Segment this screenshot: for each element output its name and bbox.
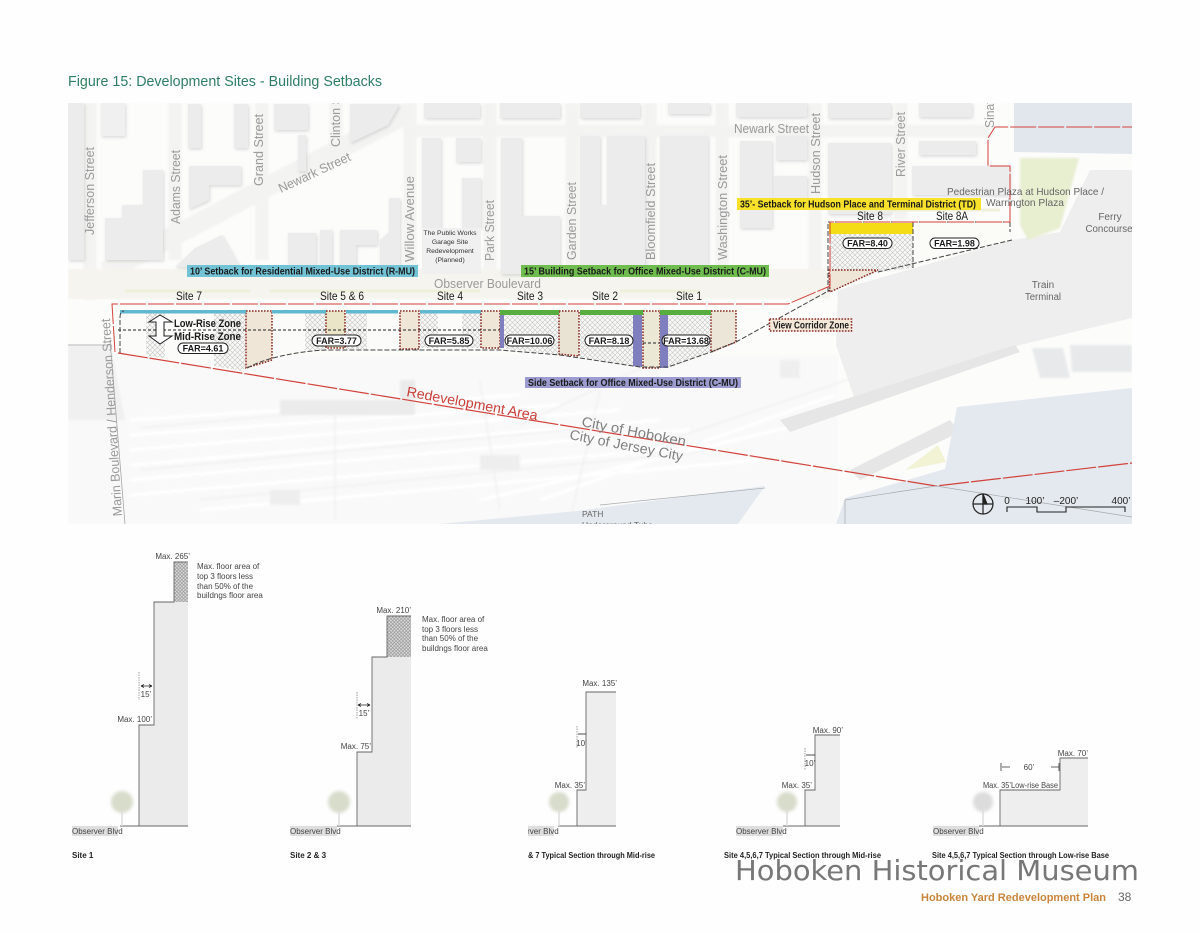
site 8 hatch	[828, 234, 913, 292]
far 4.61: FAR=4.61	[183, 344, 223, 354]
setback dimension	[139, 672, 152, 700]
rail yard	[334, 427, 592, 489]
tree	[549, 792, 569, 826]
site 4 hatch	[420, 313, 481, 348]
train terminal: Train	[1032, 280, 1054, 291]
far 1.98: FAR=1.98	[934, 238, 975, 248]
outline	[337, 616, 411, 826]
height label 210: Max. 210’	[376, 606, 411, 615]
place labels: Underground Tube	[582, 520, 653, 530]
view corridors	[246, 311, 736, 368]
place labels: Concourse	[1086, 224, 1133, 235]
river street: River Street	[893, 112, 908, 177]
observer boulevard: Observer Boulevard	[434, 276, 541, 291]
floor area note: buildngs floor area	[422, 644, 488, 653]
section: mid-rise 90	[724, 726, 882, 860]
jefferson street: Jefferson Street	[82, 147, 97, 235]
height label 265: Max. 265’	[155, 552, 190, 561]
tag: residential setback: 10’ Setback for Residential Mixed-Use District (R-MU)	[190, 266, 415, 278]
top floors hatch	[387, 616, 411, 657]
floor area note	[197, 562, 263, 600]
top floors hatch	[174, 562, 188, 602]
site 8 corridor	[829, 270, 878, 292]
floor area note: Max. floor area of	[197, 562, 260, 571]
scale bar: 0	[1004, 496, 1010, 507]
low rise label: Low-Rise Zone	[174, 318, 241, 330]
setback dimension	[805, 748, 816, 770]
page: development sites building setbacks	[68, 75, 1136, 904]
caption: & 7 Typical Section through Mid-rise	[528, 851, 656, 860]
caption: Site 2 & 3	[290, 851, 327, 860]
setback dimension	[576, 726, 587, 748]
grand street: Grand Street	[251, 114, 266, 186]
street label: Observer Blvd	[290, 827, 341, 836]
watermark: Hoboken Historical Museum	[735, 854, 1139, 887]
site 2	[580, 310, 643, 368]
outline	[120, 562, 188, 826]
side setback strips	[500, 315, 668, 368]
path tube: PATH	[582, 509, 603, 519]
street label: Observer Blvd	[508, 827, 559, 836]
site 5 and 6 hatch	[305, 313, 367, 350]
setback dimension	[357, 692, 370, 719]
redevelopment area boundary	[112, 127, 1132, 486]
site labels: Site 3	[517, 289, 543, 303]
page number: 38	[1118, 890, 1132, 904]
tag: office setback: 15’ Building Setback for Office Mixed-Use District (C-MU)	[524, 266, 766, 278]
setback dimension: 10’	[805, 759, 816, 768]
water bottom right	[836, 388, 1132, 524]
buildings	[68, 103, 1010, 274]
street grid	[68, 103, 990, 300]
platforms	[780, 345, 1020, 432]
washington street: Washington Street	[715, 155, 730, 260]
place labels	[582, 186, 1133, 530]
section: site 2 and 3	[290, 606, 488, 860]
low and mid rise zones	[149, 315, 241, 344]
green plaza	[1020, 158, 1079, 240]
park street: Park Street	[482, 200, 497, 261]
site 8 setback	[829, 223, 913, 234]
far 5.85: FAR=5.85	[429, 336, 469, 346]
caption: Site 1	[72, 851, 94, 860]
section: site 1	[72, 552, 263, 860]
floor area note: than 50% of the	[197, 582, 254, 591]
floor area note: Max. floor area of	[422, 615, 485, 624]
ferry piers	[1032, 345, 1132, 378]
newark street horizontal: Newark Street	[734, 121, 809, 136]
map panel	[68, 103, 1132, 524]
site labels: Site 8A	[936, 209, 968, 223]
far 13.68: FAR=13.68	[663, 336, 709, 346]
jersey city shoreline	[600, 486, 1132, 524]
site labels: Site 8	[857, 209, 883, 223]
marin boulevard line	[68, 340, 125, 524]
clinton street: Clinton Street	[328, 71, 343, 147]
public works note: The Public Works	[423, 230, 477, 237]
FAR pills	[178, 238, 979, 354]
mid rise label: Mid-Rise Zone	[174, 331, 241, 343]
tag: terminal setback: 35’- Setback for Hudson Place and Terminal District (TD)	[740, 200, 976, 210]
caption: Site 4,5,6,7 Typical Section through Mid-rise	[724, 851, 882, 860]
city of hoboken label: City of Hoboken	[580, 413, 688, 449]
tree	[328, 791, 350, 826]
site 3	[502, 315, 559, 354]
footer title: Hoboken Yard Redevelopment Plan	[921, 892, 1106, 904]
zone outlines and hatches	[118, 290, 830, 372]
site 7 hatch	[146, 313, 246, 371]
height label 35: Max. 35’	[782, 781, 812, 790]
setback dimension: 15’	[141, 690, 152, 699]
height label 90: Max. 90’	[813, 726, 843, 735]
scale bar: –200’	[1054, 496, 1078, 507]
floor area note: top 3 floors less	[422, 625, 478, 634]
site 8 outline	[828, 222, 1012, 292]
setback legend tags	[187, 198, 981, 389]
site 8A area	[913, 222, 1010, 268]
north arrow	[973, 494, 993, 514]
newark street diagonal: Newark Street	[276, 149, 353, 196]
public works note: Redevelopment	[426, 248, 474, 255]
site labels	[176, 209, 968, 303]
far 8.40: FAR=8.40	[847, 238, 888, 248]
far 10.06: FAR=10.06	[507, 336, 552, 346]
street labels	[82, 58, 997, 517]
tree	[111, 791, 133, 826]
caption: Site 4,5,6,7 Typical Section through Low-rise Base	[932, 851, 1110, 860]
site boundary	[120, 290, 830, 368]
street label: Observer Blvd	[933, 827, 984, 836]
setback dimension: 10’	[576, 739, 587, 748]
terminal area	[836, 170, 1132, 400]
height label 75: Max. 75’	[341, 742, 371, 751]
height label 35: Max. 35’	[555, 781, 585, 790]
site labels: Site 4	[437, 289, 463, 303]
floor area note	[422, 615, 488, 653]
floor area note: than 50% of the	[422, 634, 479, 643]
street label: Observer Blvd	[736, 827, 787, 836]
corridor road strips	[125, 210, 1000, 291]
far 3.77: FAR=3.77	[316, 336, 357, 346]
residential setback strips	[120, 310, 481, 314]
height label 135: Max. 135’	[582, 679, 617, 688]
title: Figure 15: Development Sites - Building Setbacks	[68, 74, 382, 90]
yellow park	[905, 445, 946, 470]
site labels: Site 2	[592, 289, 618, 303]
setback dimension: 60’	[1024, 763, 1035, 772]
train station buildings	[68, 345, 800, 505]
bloomfield street: Bloomfield Street	[643, 163, 658, 260]
ferry concourse: Ferry	[1098, 212, 1122, 223]
office setback strips	[500, 310, 711, 315]
site 5 and 6	[272, 310, 398, 358]
site 4	[420, 310, 481, 348]
site labels: Site 7	[176, 289, 202, 303]
far 8.18: FAR=8.18	[589, 336, 629, 346]
place labels: Terminal	[1025, 292, 1061, 303]
outline	[558, 692, 616, 826]
site labels: Site 5 & 6	[320, 289, 364, 303]
icon: double arrow	[149, 315, 172, 344]
site 1	[668, 315, 711, 368]
floor area note: top 3 floors less	[197, 572, 253, 581]
water bottom centre	[439, 486, 765, 524]
floor area note: buildngs floor area	[197, 591, 263, 600]
scale bar: 400’	[1112, 496, 1130, 507]
site 8	[828, 222, 1012, 292]
water top right	[1014, 103, 1132, 154]
setback dimension	[1001, 763, 1059, 772]
public works note: (Planned)	[435, 257, 465, 264]
tree	[777, 792, 797, 826]
section: mid-rise 135	[508, 679, 656, 860]
height label 100: Max. 100’	[117, 715, 152, 724]
pedestrian plaza: Pedestrian Plaza at Hudson Place /	[947, 186, 1104, 198]
tag: side setback: Side Setback for Office Mixed-Use District (C-MU)	[528, 378, 738, 389]
redevelopment area label: Redevelopment Area	[405, 383, 539, 423]
zone divider	[118, 330, 660, 343]
marin boulevard henderson street: Marin Boulevard / Henderson Street	[98, 318, 125, 517]
scale bar	[1004, 496, 1130, 512]
willow avenue: Willow Avenue	[402, 176, 417, 262]
outline	[783, 735, 840, 826]
scale bar: 100’	[1026, 496, 1044, 507]
height label 70: Max. 70’	[1058, 749, 1088, 758]
tree	[973, 792, 993, 826]
street label: Observer Blvd	[72, 827, 123, 836]
warrington plaza: Warrington Plaza	[986, 197, 1064, 209]
public works note	[423, 230, 477, 264]
building profile	[139, 562, 188, 826]
adams street: Adams Street	[168, 150, 183, 224]
setback dimension: 15’	[359, 709, 370, 718]
site labels: Site 1	[676, 289, 702, 303]
tag: view corridor: View Corridor Zone	[773, 320, 849, 332]
city of jersey city label: City of Jersey City	[568, 426, 684, 464]
public works note: Garage Site	[432, 239, 468, 246]
public works garage site	[422, 228, 481, 269]
garden street: Garden Street	[564, 182, 579, 260]
low-rise base label: Max. 35’Low-rise Base	[983, 781, 1059, 790]
sinatra drive: Sinatra Drive	[982, 58, 997, 128]
section: low-rise base	[932, 749, 1110, 860]
site 7	[120, 310, 246, 372]
outline	[979, 758, 1088, 826]
hudson street: Hudson Street	[808, 113, 823, 194]
